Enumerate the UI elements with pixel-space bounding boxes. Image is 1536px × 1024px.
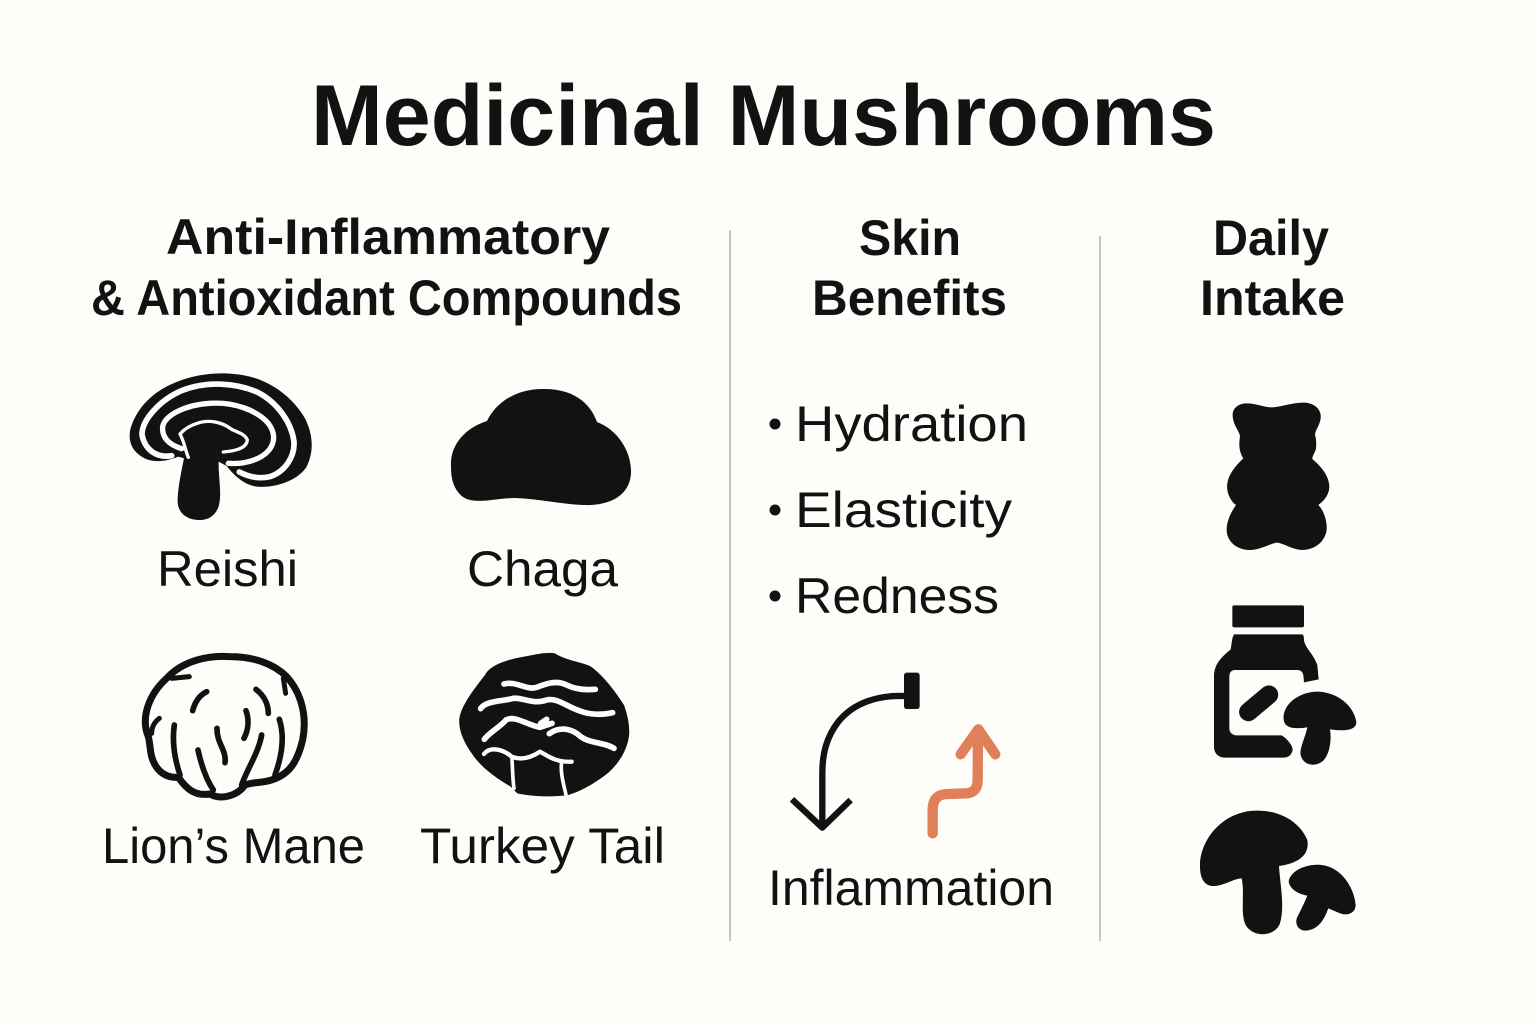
icon: gummy bear — [1227, 403, 1329, 550]
label: Turkey Tail: Turkey Tail — [420, 818, 665, 874]
panel: anti-inflammatory and antioxidant compounds — [91, 209, 682, 874]
heading: skin benefits: Skin — [859, 210, 961, 266]
list: benefits: Hydration — [795, 396, 1028, 452]
heading: daily intake: Intake — [1200, 270, 1345, 326]
label: Reishi: Reishi — [157, 541, 298, 597]
heading: compounds: & Antioxidant Compounds — [91, 270, 682, 326]
icon: black curved arrow down — [792, 673, 920, 828]
label: Inflammation: Inflammation — [768, 860, 1054, 916]
icon: two mushrooms — [1200, 811, 1356, 934]
label: Chaga: Chaga — [467, 541, 618, 597]
icon: supplement jar with mushroom — [1214, 605, 1356, 765]
icon: reishi mushroom — [130, 373, 312, 520]
list: benefits: Elasticity — [795, 482, 1012, 538]
title: Medicinal Mushrooms — [311, 68, 1216, 164]
heading: compounds: Anti-Inflammatory — [166, 209, 610, 265]
panel: skin benefits — [768, 210, 1054, 916]
panel: daily intake — [1200, 210, 1356, 934]
icon: orange winding arrow up — [933, 729, 995, 833]
heading: skin benefits — [812, 210, 1007, 326]
list: benefits: Redness — [795, 568, 999, 624]
heading: daily intake — [1200, 210, 1345, 326]
label: Lion's Mane: Lion’s Mane — [102, 818, 365, 874]
icon: chaga mushroom — [451, 389, 631, 505]
heading: daily intake: Daily — [1213, 210, 1329, 266]
heading: compounds — [91, 209, 682, 326]
list: benefits — [770, 396, 1028, 624]
icon: lion's mane mushroom — [145, 656, 304, 797]
heading: skin benefits: Benefits — [812, 270, 1007, 326]
icon: turkey tail mushroom — [459, 653, 629, 796]
